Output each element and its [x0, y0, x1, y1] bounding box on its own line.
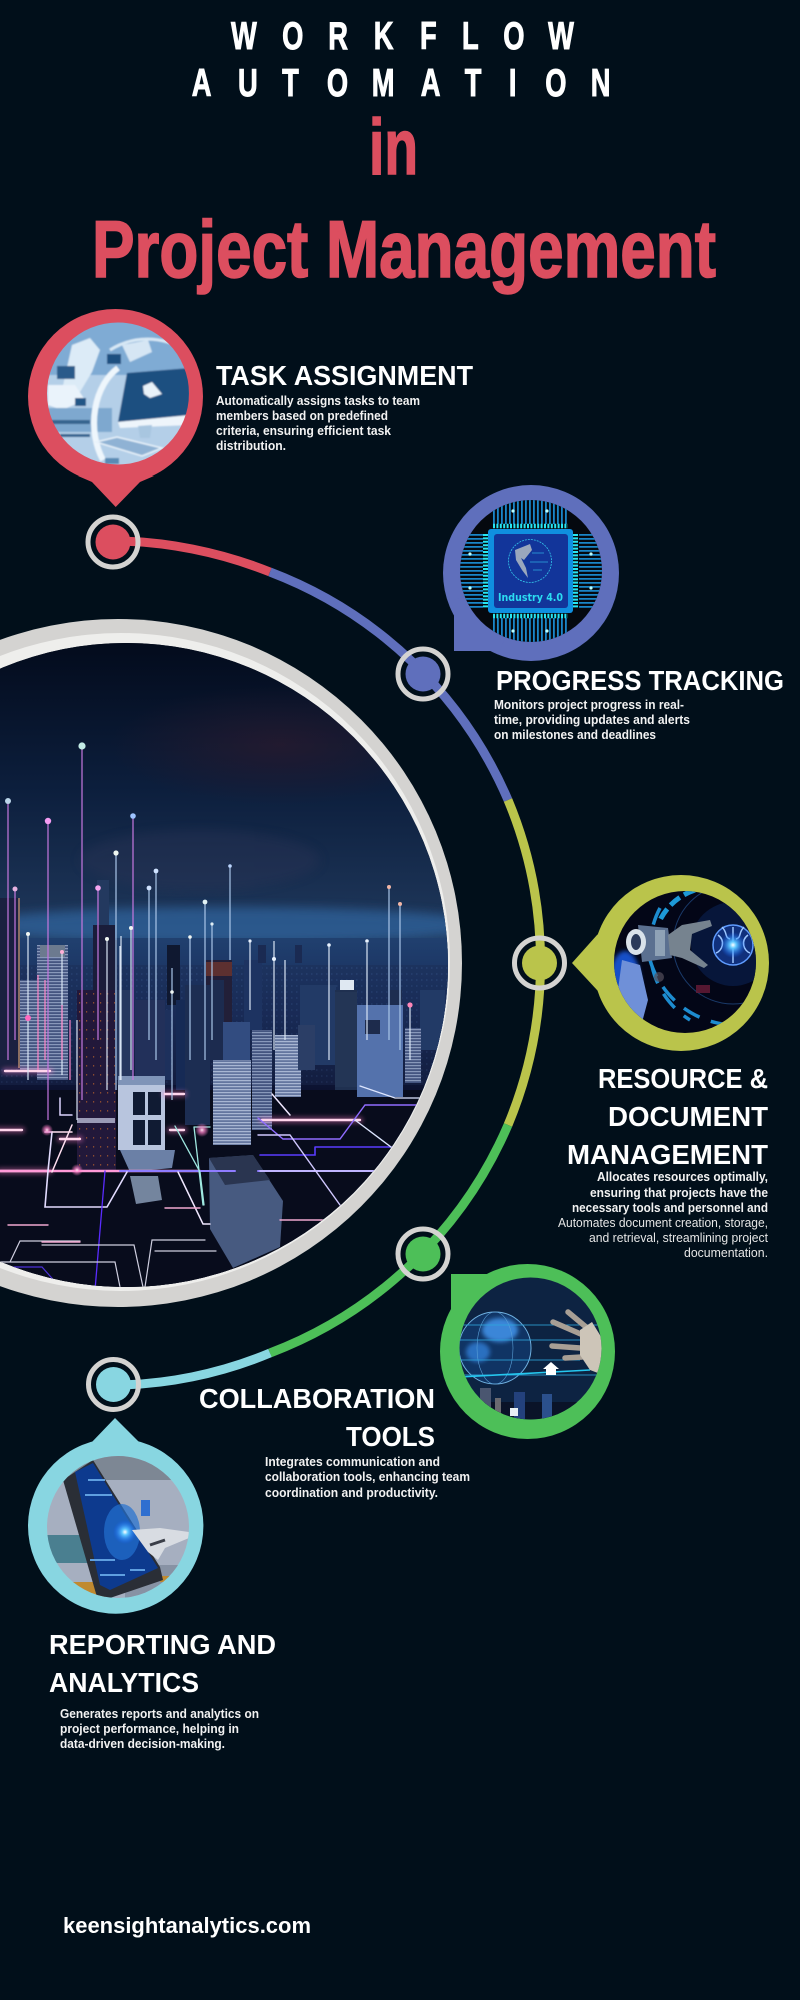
neon traces [0, 1071, 440, 1290]
central city photo circle [0, 619, 490, 1307]
panel: progress tracking [443, 485, 784, 742]
pin: light blue [28, 1418, 203, 1614]
title [92, 15, 716, 295]
panel: task assignment [28, 309, 473, 507]
heading: COLLABORATION [199, 1383, 435, 1414]
description: data-driven decision-making. [60, 1737, 225, 1751]
description: project performance, helping in [60, 1722, 239, 1736]
description: collaboration tools, enhancing team [265, 1470, 470, 1484]
panel: collaboration tools [199, 1264, 615, 1500]
node: light blue [88, 1360, 138, 1410]
pin: blue [443, 485, 619, 661]
description: necessary tools and personnel and [572, 1201, 768, 1215]
arc segment: red [113, 541, 270, 572]
description: criteria, ensuring efficient task [216, 424, 392, 438]
pin: blue: Industry 4.0 [498, 592, 563, 604]
foreground buildings [0, 898, 421, 1268]
footer url: keensightanalytics.com [63, 1913, 311, 1938]
description: documentation. [684, 1246, 768, 1260]
panel: resource and document management [558, 875, 769, 1257]
light poles [8, 747, 410, 1120]
description: Integrates communication and [265, 1455, 440, 1469]
heading: MANAGEMENT [567, 1139, 768, 1170]
title line: workflow: WORKFLOW [231, 15, 574, 58]
description [216, 394, 420, 453]
description: Automates document creation, storage, [558, 1216, 768, 1230]
pin: red [28, 309, 203, 507]
description: and retrieval, streamlining project [589, 1231, 768, 1245]
description [494, 698, 690, 742]
title line: in: in [369, 102, 418, 191]
description: on milestones and deadlines [494, 728, 656, 742]
heading [567, 1063, 768, 1170]
pin: green [440, 1264, 615, 1439]
title line: automation: AUTOMATION [192, 62, 611, 105]
description: members based on predefined [216, 409, 388, 423]
heading: DOCUMENT [608, 1101, 768, 1132]
heading [49, 1629, 276, 1698]
arc segment: green [270, 1125, 508, 1353]
description: time, providing updates and alerts [494, 713, 690, 727]
arc segment: olive [508, 800, 541, 1125]
large foreground block [209, 1155, 283, 1268]
description: Monitors project progress in real- [494, 698, 684, 712]
connecting arc [113, 541, 541, 1385]
heading: REPORTING AND [49, 1629, 276, 1660]
node: red [88, 517, 138, 567]
description [60, 1707, 259, 1751]
description: Automatically assigns tasks to team [216, 394, 420, 408]
description: ensuring that projects have the [590, 1186, 768, 1200]
heading: TOOLS [346, 1421, 435, 1452]
pin: olive [572, 875, 769, 1051]
description: distribution. [216, 439, 286, 453]
white frame building [118, 1078, 165, 1150]
heading: ANALYTICS [49, 1667, 199, 1698]
heading: RESOURCE & [598, 1063, 768, 1094]
node: blue [398, 649, 448, 699]
node: green [398, 1229, 448, 1279]
description: Allocates resources optimally, [597, 1170, 768, 1184]
description [265, 1455, 470, 1500]
arc segment: light blue [113, 1353, 270, 1385]
panel: reporting and analytics [28, 1418, 276, 1751]
arc segment: blue [270, 572, 508, 800]
heading: TASK ASSIGNMENT [216, 360, 473, 391]
description: Generates reports and analytics on [60, 1707, 259, 1721]
distant buildings [0, 880, 460, 1090]
description: coordination and productivity. [265, 1486, 438, 1500]
heading [199, 1383, 435, 1452]
description [558, 1170, 768, 1260]
node: olive [514, 938, 564, 988]
